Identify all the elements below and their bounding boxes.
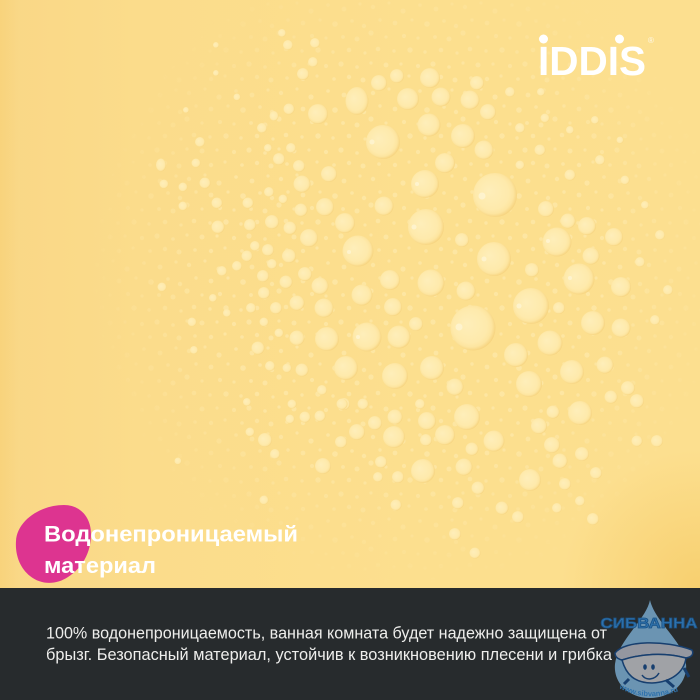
heading: материал [44,553,156,578]
water droplets texture [136,2,673,558]
pink accent blob [16,505,91,583]
watermark url: www.sibvanna.ru [620,684,678,696]
description text [46,624,613,664]
bathtub character [615,643,693,687]
watermark: СИБВАННА bathtub in water drop [600,600,698,698]
heading [44,522,298,578]
description text: брызг. Безопасный материал, устойчив к возникновению плесени и грибка [46,646,613,664]
dark description panel [0,588,700,700]
watermark name: СИБВАННА [600,616,698,632]
droplet highlights [347,140,572,339]
bathtub eyes [643,664,655,670]
description text: 100% водонепроницаемость, ванная комната будет надежно защищена от [46,624,607,642]
logo: iDDiS: ® [648,36,654,45]
logo: iDDiS: IDDIS [538,38,646,84]
heading: Водонепроницаемый [44,522,298,546]
watermark drop [615,600,686,698]
